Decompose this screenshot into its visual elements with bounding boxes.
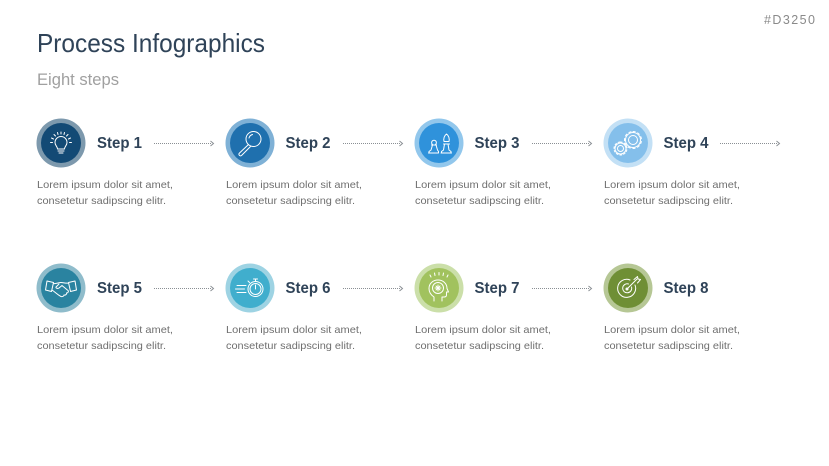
label: Step 8 <box>664 280 709 297</box>
label: Step 3 <box>474 135 520 152</box>
icon: target with arrow <box>604 264 652 312</box>
label: Step 5 <box>97 280 142 297</box>
icon: stopwatch <box>226 264 274 312</box>
label: Step 6 <box>286 280 331 297</box>
icon: handshake <box>36 264 86 312</box>
title: Process Infographics <box>37 28 265 58</box>
description: consetetur sadipscing elitr. <box>37 195 166 207</box>
description: consetetur sadipscing elitr. <box>604 340 733 352</box>
step 3 <box>414 118 592 207</box>
description: consetetur sadipscing elitr. <box>226 195 355 207</box>
icon: head with brain <box>414 264 464 312</box>
label: Step 4 <box>664 135 709 152</box>
icon: gears <box>604 118 652 168</box>
arrow <box>343 141 402 146</box>
description: consetetur sadipscing elitr. <box>604 195 733 207</box>
arrow <box>154 286 214 291</box>
label: Step 2 <box>286 135 331 152</box>
arrow <box>532 141 592 146</box>
description: Lorem ipsum dolor sit amet, <box>226 179 362 191</box>
label: Step 7 <box>474 280 520 297</box>
arrow <box>154 141 214 146</box>
icon: chess pieces <box>414 118 464 168</box>
arrow <box>532 286 592 291</box>
subtitle: Eight steps <box>37 70 119 89</box>
description: Lorem ipsum dolor sit amet, <box>415 324 551 336</box>
arrow <box>720 141 780 146</box>
description: Lorem ipsum dolor sit amet, <box>37 179 173 191</box>
description: Lorem ipsum dolor sit amet, <box>415 179 551 191</box>
description: consetetur sadipscing elitr. <box>226 340 355 352</box>
label: Step 1 <box>97 135 142 152</box>
description: Lorem ipsum dolor sit amet, <box>226 324 362 336</box>
description: Lorem ipsum dolor sit amet, <box>37 324 173 336</box>
step 4 <box>604 118 780 207</box>
description: Lorem ipsum dolor sit amet, <box>604 324 740 336</box>
description: Lorem ipsum dolor sit amet, <box>604 179 740 191</box>
description: consetetur sadipscing elitr. <box>415 195 544 207</box>
icon: magnifying glass <box>226 118 274 168</box>
step 6 <box>226 264 402 352</box>
description: consetetur sadipscing elitr. <box>415 340 544 352</box>
step 5 <box>36 264 214 352</box>
description: consetetur sadipscing elitr. <box>37 340 166 352</box>
arrow <box>343 286 402 291</box>
icon: light bulb <box>36 118 86 168</box>
document code: #D3250 <box>764 13 815 27</box>
step 7 <box>414 264 592 352</box>
step 2 <box>226 118 402 207</box>
step 1 <box>36 118 214 207</box>
step 8 <box>604 264 740 352</box>
